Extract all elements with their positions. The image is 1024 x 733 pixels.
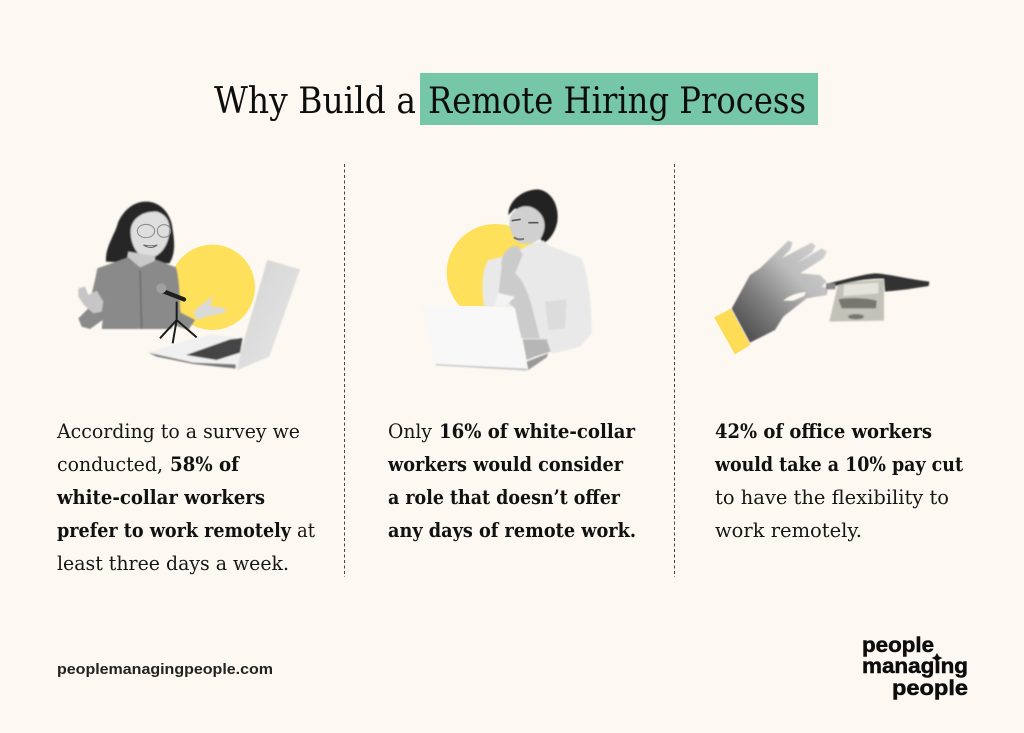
text: role consideration: any days of remote work.: [388, 518, 636, 542]
text: pay cut: to have the flexibility to: [715, 485, 949, 509]
text: pay cut: [714, 419, 964, 542]
panel: survey preference: [56, 202, 315, 575]
logo: people managing people: people: [862, 634, 934, 657]
text: survey preference: prefer to work remotely: [57, 518, 292, 542]
text: role consideration: a role that doesn’t offer: [388, 485, 620, 509]
panel: role consideration: [387, 189, 636, 542]
text: survey preference: [56, 419, 315, 575]
logo: people managing people: [862, 634, 968, 700]
text: survey preference: at: [297, 518, 315, 542]
text: survey preference: 58% of: [170, 452, 240, 476]
title plain text: Why Build a: [214, 81, 416, 122]
text: pay cut: work remotely.: [715, 518, 862, 542]
icon: hand pulling money from wallet: [714, 241, 929, 354]
footer website: peoplemanagingpeople.com: [57, 661, 273, 678]
title highlighted text: Remote Hiring Process: [428, 81, 806, 122]
text: pay cut: 42% of office workers: [715, 419, 932, 443]
logo: people managing people: people: [892, 677, 968, 700]
text: survey preference: white-collar workers: [56, 485, 265, 509]
panel: pay cut: [714, 241, 964, 542]
text: role consideration: [387, 419, 636, 542]
text: survey preference: least three days a week.: [57, 551, 289, 575]
text: survey preference: conducted,: [57, 452, 163, 476]
text: role consideration: workers would consider: [387, 452, 623, 476]
text: role consideration: Only: [388, 419, 433, 443]
title highlight: [420, 73, 818, 125]
text: survey preference: According to a survey we: [56, 419, 300, 443]
icon: thinking woman at laptop: [421, 189, 592, 371]
text: pay cut: would take a 10% pay cut: [714, 452, 964, 476]
title: [214, 73, 818, 125]
logo: people managing people: managing: [862, 655, 968, 678]
text: role consideration: 16% of white-collar: [439, 419, 635, 443]
icon: woman with microphone and laptop: [78, 202, 300, 370]
